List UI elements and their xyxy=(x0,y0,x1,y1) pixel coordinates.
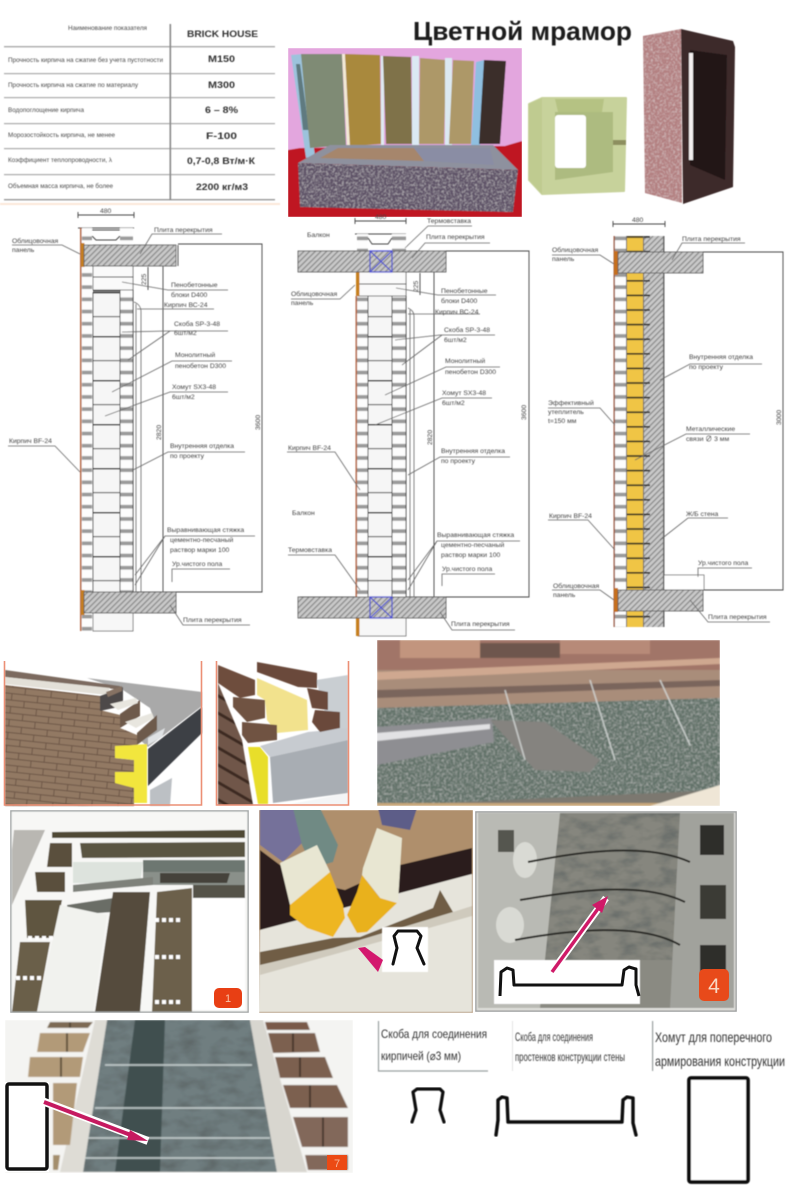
table: brick characteristics: 6 – 8% xyxy=(205,105,239,116)
dimension lines: 480 xyxy=(100,208,112,215)
callout labels: Плита перекрытия xyxy=(708,614,767,621)
table: brick characteristics: Наименование показателя xyxy=(68,25,147,32)
photo: pouring concrete into wall cavity xyxy=(377,640,720,806)
badge: 7 xyxy=(327,1155,347,1170)
callout labels: Пенобетонные xyxy=(171,281,218,289)
table: brick characteristics: BRICK HOUSE xyxy=(187,29,258,40)
callout labels: Хомут SX3-48 xyxy=(442,390,486,397)
callout labels: 6шт/м2 xyxy=(444,337,467,344)
callout labels: Облицовочная xyxy=(12,237,58,245)
caption: brick staple: Скоба для соединения xyxy=(381,1027,487,1041)
panel: 3D corner with tie-in xyxy=(4,669,203,807)
callout labels: раствор марки 100 xyxy=(441,552,501,559)
panel: 3D block wall with insulation xyxy=(218,661,348,806)
arrow: points to staple xyxy=(552,896,608,972)
inset: long staple shape xyxy=(494,960,640,1004)
photo 2: gloved hands placing staple xyxy=(259,810,473,1013)
callout labels: Скоба SP-3-48 xyxy=(444,326,490,334)
dimension lines xyxy=(613,217,783,590)
callout labels: Хомут SX3-48 xyxy=(172,384,216,391)
callout labels: t=150 мм xyxy=(548,418,577,425)
floor slabs xyxy=(618,252,703,611)
caption: wall staple: Скоба для соединения xyxy=(515,1030,593,1044)
table: brick characteristics xyxy=(0,24,280,205)
callout labels: Внутренняя отделка xyxy=(170,443,234,450)
callout labels: утеплитель xyxy=(548,409,584,416)
callout labels: Выравнивающая стяжка xyxy=(167,527,244,534)
callout labels: по проекту xyxy=(441,458,476,465)
callout labels: Скоба SP-3-48 xyxy=(174,320,220,328)
dimension lines: 2820 xyxy=(156,425,163,440)
inset: clamp shape xyxy=(4,1082,49,1172)
badge: 1 xyxy=(214,988,242,1008)
callout labels: Балкон xyxy=(307,232,330,239)
callout labels: цементно-песчаный xyxy=(441,541,504,549)
callout labels: Кирпич ВF-24 xyxy=(288,445,331,452)
icon: wall staple xyxy=(496,1097,636,1135)
dimension lines: 3600 xyxy=(521,405,528,420)
callout labels: Пенобетонные xyxy=(441,287,488,295)
callout labels: Кирпич ВС-24 xyxy=(164,302,208,309)
callout labels: Облицовочная xyxy=(291,290,337,298)
callout labels: панель xyxy=(552,256,575,263)
callout labels: Облицовочная xyxy=(553,582,599,590)
callout labels: Кирпич ВС-24 xyxy=(435,309,479,316)
dimension lines: 480 xyxy=(375,214,387,221)
drawing: wall section 1 xyxy=(8,208,262,631)
callout labels: Плита перекрытия xyxy=(682,236,741,243)
callout labels: Термовставка xyxy=(427,218,471,225)
table: brick characteristics: Водопоглощение кирпича xyxy=(8,107,84,114)
table: brick characteristics: Прочность кирпича на сжатие по материалу xyxy=(8,82,139,89)
callout labels: Монолитный xyxy=(445,357,485,365)
table: brick characteristics: F-100 xyxy=(206,131,237,142)
callout labels: пенобетон D300 xyxy=(175,362,226,370)
badge: 1: 1 xyxy=(225,993,231,1005)
dimension lines: 3000 xyxy=(776,410,783,425)
callout labels: 6шт/м2 xyxy=(172,394,195,401)
photo 3: staple joins block walls xyxy=(475,811,737,1012)
wall bricks xyxy=(80,228,141,631)
callout labels: по проекту xyxy=(689,364,724,371)
callout labels: панель xyxy=(553,592,576,599)
callout labels: связи ∅ 3 мм xyxy=(686,435,729,443)
wall layers xyxy=(614,236,704,627)
callout labels: Металлические xyxy=(686,426,735,433)
table: brick characteristics: Прочность кирпича на сжатие без учета пустотности xyxy=(8,56,163,64)
title: Цветной мрамор xyxy=(413,16,632,46)
icon: brick staple xyxy=(412,1089,444,1122)
callout labels: Монолитный xyxy=(175,351,215,359)
callout labels: Плита перекрытия xyxy=(183,617,242,624)
floor slabs with thermal inserts xyxy=(298,251,446,618)
callout labels: панель xyxy=(12,247,35,254)
callout labels: Плита перекрытия xyxy=(451,621,510,628)
callout labels: Ур.чистого пола xyxy=(442,566,493,573)
dimension lines: 3600 xyxy=(255,415,262,430)
table: brick characteristics: M300 xyxy=(208,80,235,91)
callout labels: Балкон xyxy=(292,510,315,517)
callout labels: Облицовочная xyxy=(552,246,598,254)
callout labels xyxy=(8,227,255,625)
callout labels: Выравнивающая стяжка xyxy=(437,532,514,539)
dimension lines xyxy=(78,208,262,592)
table: brick characteristics: M150 xyxy=(208,54,235,65)
icon: pink hollow block xyxy=(643,29,735,204)
callout labels: раствор марки 100 xyxy=(170,547,230,554)
callout labels: по проекту xyxy=(170,453,205,460)
callout labels: Ж/Б стена xyxy=(686,511,718,518)
caption: brick staple: кирпичей (⌀3 мм) xyxy=(381,1049,461,1063)
photo 1: laying first course with badge xyxy=(10,810,249,1013)
caption: brick staple xyxy=(378,1021,488,1071)
wall bricks xyxy=(356,234,414,636)
callout labels: Плита перекрытия xyxy=(426,234,485,241)
callout labels: Ур.чистого пола xyxy=(172,561,223,568)
callout labels: 6шт/м2 xyxy=(442,400,465,407)
callout labels: Кирпич ВF-24 xyxy=(549,513,592,520)
drawing: wall section 2 (balcony) xyxy=(287,214,529,636)
caption: transverse clamp xyxy=(652,1021,785,1071)
icon: transverse clamp xyxy=(689,1078,748,1182)
dimension lines: 480 xyxy=(632,217,644,224)
dimension lines: 225 xyxy=(413,280,420,292)
drawing: wall section 3 (insulated) xyxy=(548,217,783,627)
table: brick characteristics: Коэффициент теплопроводности, λ xyxy=(8,157,113,164)
callout labels: блоки D400 xyxy=(441,297,478,305)
callout labels: Плита перекрытия xyxy=(154,227,213,234)
dimension lines xyxy=(300,214,529,597)
dimension lines: 2820 xyxy=(427,430,434,445)
callout labels: Эффективный xyxy=(548,399,594,407)
callout labels: панель xyxy=(291,300,314,307)
badge: 4 xyxy=(699,969,729,1001)
table: brick characteristics: 2200 кг/м3 xyxy=(196,182,248,193)
panel frame: 3D corner 1 xyxy=(4,661,202,805)
photo: colour brick samples xyxy=(288,48,522,217)
badge: 4: 4 xyxy=(708,975,720,998)
panel frame: 3D corner 2 xyxy=(216,661,348,805)
arrow: points to clamp xyxy=(42,1101,148,1141)
table: brick characteristics: Морозостойкость кирпича, не менее xyxy=(8,131,115,139)
table: brick characteristics: Объемная масса кирпича, не более xyxy=(8,182,113,190)
callout labels: Внутренняя отделка xyxy=(441,448,505,455)
callout labels: блоки D400 xyxy=(171,291,208,299)
photo 4: transverse clamps in cavity xyxy=(5,1020,353,1173)
floor slabs xyxy=(84,245,176,613)
callout labels: Внутренняя отделка xyxy=(689,354,753,361)
callout labels: Ур.чистого пола xyxy=(698,560,749,567)
callout labels xyxy=(548,236,770,622)
callout labels: Кирпич ВF-24 xyxy=(9,438,52,445)
callout labels: Термовставка xyxy=(288,547,332,554)
inset: staple shape with arrow xyxy=(358,927,428,972)
icon: green hollow block xyxy=(529,98,626,194)
callout labels: цементно-песчаный xyxy=(170,536,233,544)
table: brick characteristics: 0,7-0,8 Вт/м·К xyxy=(187,156,255,167)
callout labels: 6шт/м2 xyxy=(174,330,197,337)
callout labels: пенобетон D300 xyxy=(445,368,496,376)
dimension lines: 225 xyxy=(141,273,148,285)
caption: wall staple: простенков конструкции стены xyxy=(515,1050,625,1064)
badge: 7: 7 xyxy=(334,1158,340,1170)
caption: wall staple xyxy=(512,1021,625,1071)
callout labels xyxy=(287,218,520,630)
